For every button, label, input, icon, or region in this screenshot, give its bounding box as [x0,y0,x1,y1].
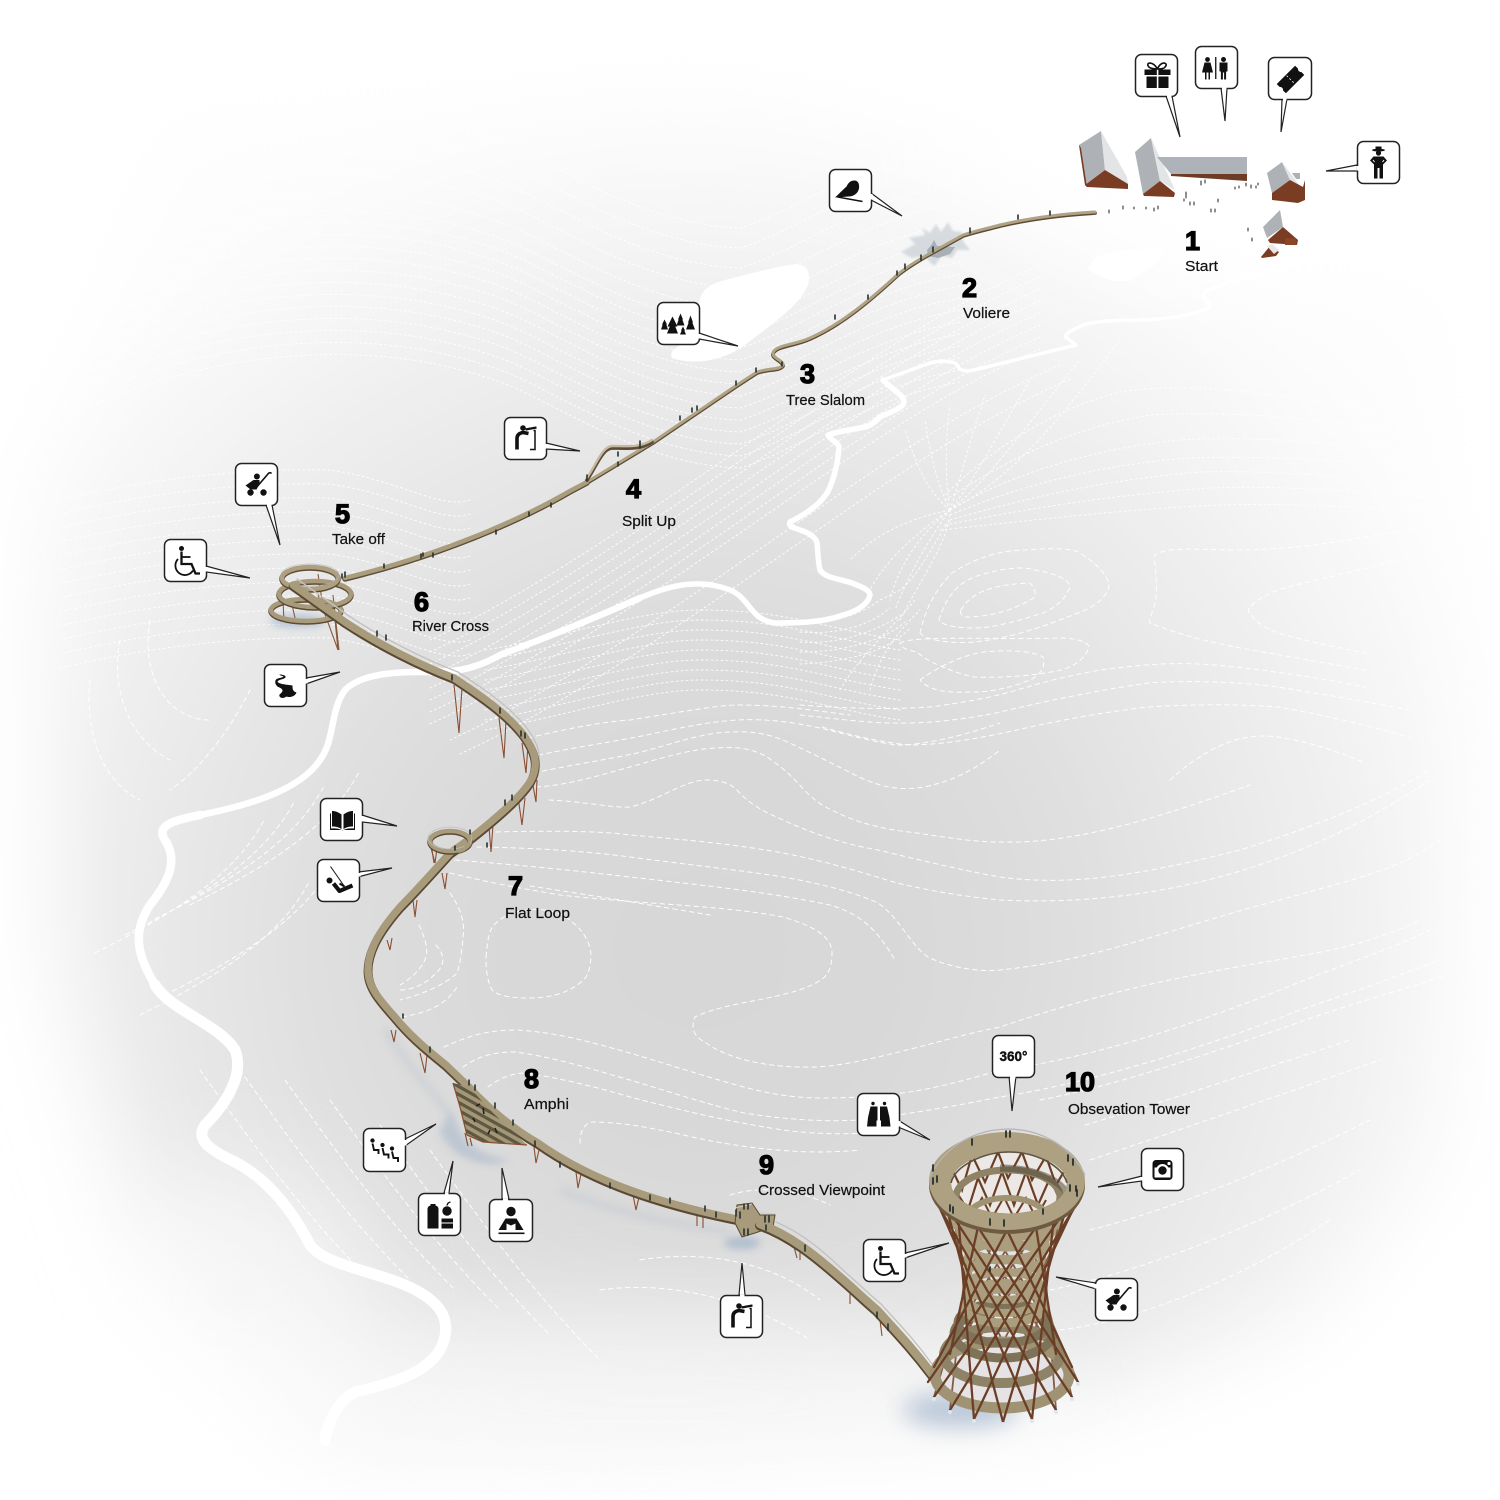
tower rear lattice [928,1150,1082,1410]
label 10: Obsevation Tower: 10 [1065,1067,1095,1097]
tower top ring interior [951,1152,1066,1214]
ponds [671,249,1163,362]
callout: reading [490,1168,532,1242]
label 2: Voliere: 2 [962,273,977,303]
callout: gift shop [1136,54,1180,137]
label 4: Split Up: Split Up [622,514,676,530]
callout: wheelchair access [164,540,250,582]
label 6: River Cross: 6 [414,587,429,617]
label 1: Start: Start [1185,259,1218,275]
label 7: Flat Loop: 7 [508,871,523,901]
crossed viewpoint platform [735,1203,776,1237]
label 3: Tree Slalom [786,359,865,409]
label 8: Amphi: 8 [524,1064,539,1094]
walkway visitors [342,211,1050,1330]
callout: food and drink [418,1161,460,1236]
callout: ranger guide [1326,142,1400,184]
label 1: Start: 1 [1185,226,1200,256]
label 8: Amphi [524,1064,569,1113]
start area visitors [1109,180,1258,241]
river [139,222,1372,1440]
callout: viewer [504,418,580,460]
callout: instagram [1098,1148,1184,1190]
label 6: River Cross [412,587,489,635]
label 3: Tree Slalom: 3 [800,359,815,389]
buildings: start area [1079,131,1305,258]
take off spiral loops [271,564,351,650]
tower base glass wall [933,1334,1069,1410]
tower spiral decks [935,1197,1069,1408]
label 8: Amphi: Amphi [524,1097,569,1113]
label 7: Flat Loop: Flat Loop [505,906,570,922]
label 9: Crossed Viewpoint: 9 [759,1150,774,1180]
contour lines [60,114,1452,1360]
label 3: Tree Slalom: Tree Slalom [786,393,865,409]
label 9: Crossed Viewpoint [758,1150,885,1199]
callout: swing [318,860,392,902]
label 2: Voliere [962,273,1010,322]
label 5: Take off: Take off [332,532,386,548]
voliere aviary [901,222,970,266]
callout: trees [658,302,738,346]
callout: amphi seats [364,1124,436,1172]
label 9: Crossed Viewpoint: Crossed Viewpoint [758,1183,885,1199]
callout: river icon [264,664,340,706]
tower top deck ring [929,1129,1085,1234]
tower visitors [933,1131,1077,1271]
walkway upper section: start to take off [345,212,1095,579]
label 5: Take off [332,499,386,548]
callout: stroller at tower [1056,1277,1138,1320]
label 4: Split Up: 4 [626,474,641,504]
callout: viewpoint [720,1263,762,1338]
label 10: Obsevation Tower [1065,1067,1190,1118]
callout: wheelchair access at tower [864,1240,949,1282]
label 2: Voliere: Voliere [963,306,1010,322]
callout: 360 degree view: 360° [1000,1049,1027,1064]
walkway lower section: river cross to amphi [293,579,752,1224]
callout: binoculars [858,1094,930,1140]
label 6: River Cross: River Cross [412,619,489,635]
label 7: Flat Loop [505,871,570,922]
support legs [387,685,882,1336]
callout: 360 degree view [992,1036,1034,1111]
ground shadows [270,615,1018,1427]
amphi seating wedge [452,1082,527,1146]
callout: restrooms [1196,46,1238,121]
tower feet [932,1382,1080,1426]
callout: stroller [236,464,280,545]
tower front lattice [928,1162,1082,1422]
callout: tickets [1268,58,1312,132]
walkway final section to tower [760,1222,932,1376]
label 5: Take off: 5 [335,499,350,529]
flat loop platform [428,827,472,863]
label 4: Split Up [622,474,676,530]
callout: book [320,798,397,840]
observation tower [928,1129,1085,1426]
label 1: Start [1185,226,1218,275]
label 10: Obsevation Tower: Obsevation Tower [1068,1102,1190,1118]
callout: bird aviary [830,170,902,216]
